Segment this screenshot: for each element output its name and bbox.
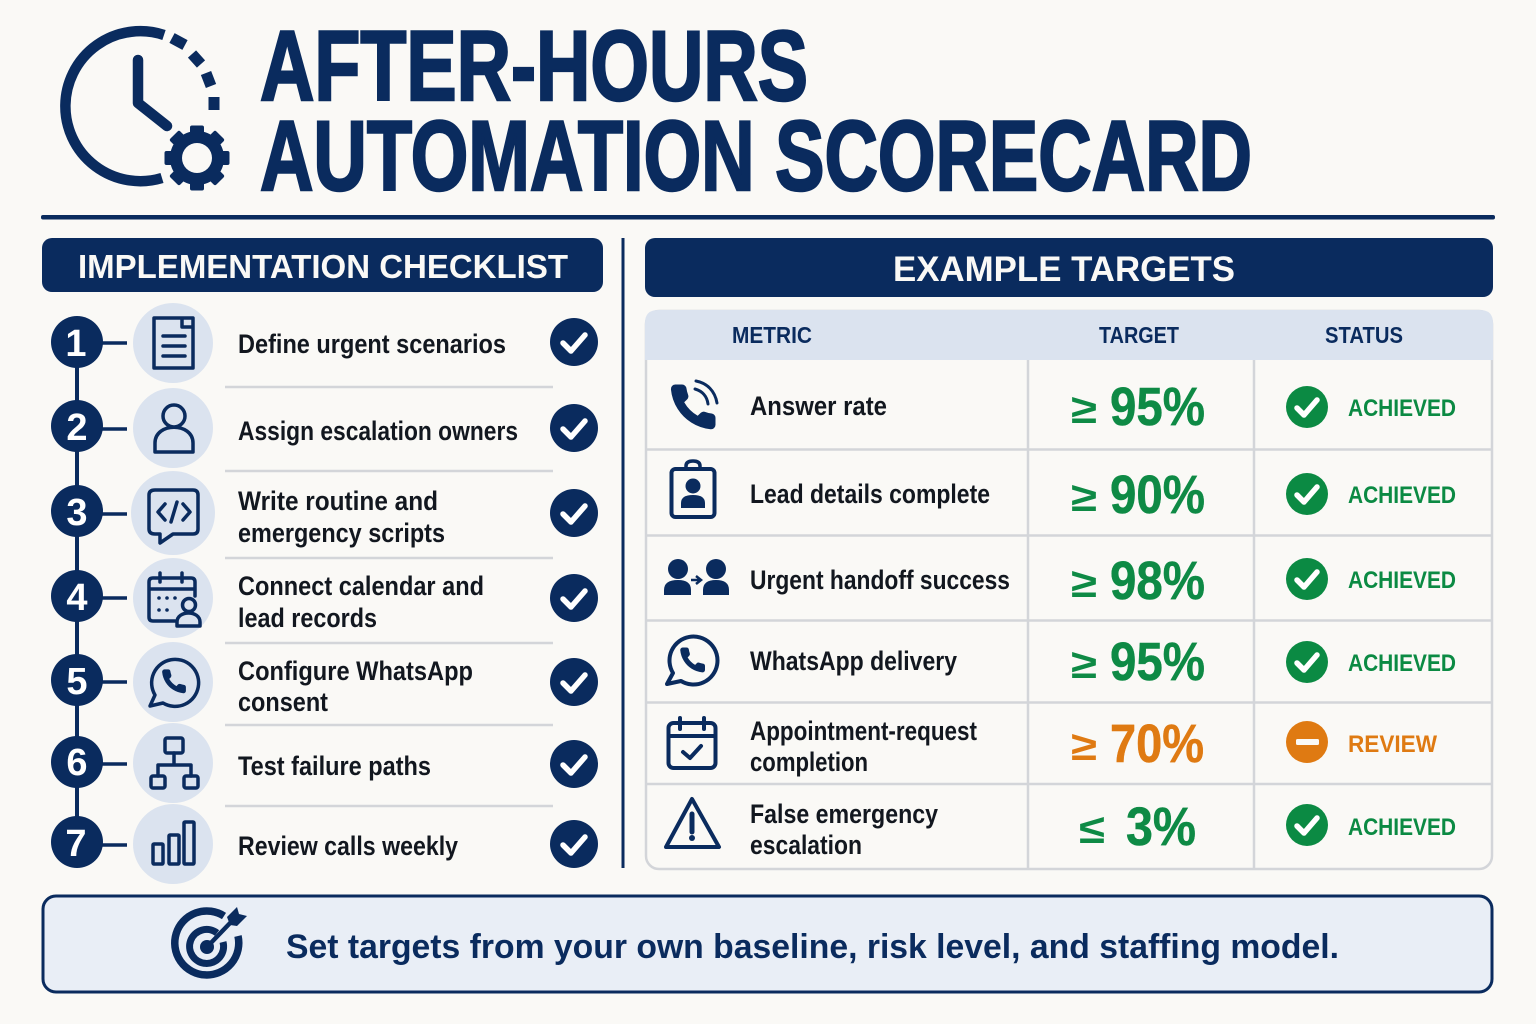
- step 5: 5: [66, 661, 88, 703]
- row: false emergency escalation: ACHIEVED: [1348, 814, 1456, 841]
- icon: warning triangle: [666, 799, 719, 847]
- table header: STATUS: [1325, 322, 1403, 348]
- row: whatsapp delivery: ≥: [1071, 641, 1097, 687]
- row: urgent handoff success: Urgent handoff success: [750, 565, 1010, 595]
- icon: whatsapp: [667, 637, 717, 685]
- row: urgent handoff success: ACHIEVED: [1348, 567, 1456, 594]
- icon: target with arrow: [175, 907, 247, 975]
- icon: calendar check: [668, 718, 716, 768]
- icon: id badge: [672, 461, 714, 517]
- row: whatsapp delivery: WhatsApp delivery: [750, 646, 957, 676]
- step 5: Configure WhatsApp: [238, 656, 473, 686]
- step 7: Review calls weekly: [238, 831, 458, 861]
- step 4: 4: [66, 577, 88, 619]
- step 6: [51, 723, 598, 803]
- step 4: Connect calendar and: [238, 571, 484, 601]
- row: appointment-request completion: Appointment-request: [750, 716, 977, 746]
- row: lead details complete: ACHIEVED: [1348, 482, 1456, 509]
- row: false emergency escalation: False emergency: [750, 799, 938, 829]
- table header: METRIC: [732, 322, 812, 348]
- step 5: consent: [238, 687, 328, 717]
- callout: set targets: Set targets from your own baseline, risk level, and staffing model.: [286, 928, 1339, 966]
- step 3: emergency scripts: [238, 518, 445, 548]
- heading: implementation checklist: IMPLEMENTATION CHECKLIST: [78, 248, 568, 285]
- icon: clock with gear: [65, 31, 229, 190]
- title: [260, 10, 1252, 211]
- row: answer rate: [671, 377, 1456, 437]
- row: lead details complete: ≥: [1071, 474, 1097, 520]
- table header: [645, 310, 1493, 360]
- step 3: [51, 471, 598, 555]
- row: false emergency escalation: ≤: [1079, 806, 1105, 852]
- step 2: [51, 388, 598, 468]
- row: answer rate: ACHIEVED: [1348, 395, 1456, 422]
- table header: TARGET: [1099, 322, 1179, 348]
- step 2: Assign escalation owners: [238, 416, 518, 446]
- callout: set targets: [43, 896, 1492, 992]
- row: whatsapp delivery: [667, 632, 1456, 692]
- step 3: Write routine and: [238, 486, 438, 516]
- row: answer rate: ≥: [1071, 386, 1097, 432]
- step 7: 7: [65, 823, 87, 865]
- icon: phone: [671, 381, 717, 429]
- step 6: Test failure paths: [238, 751, 431, 781]
- row: answer rate: Answer rate: [750, 391, 887, 421]
- heading: implementation checklist: [42, 238, 603, 292]
- row: urgent handoff success: ≥: [1071, 560, 1097, 606]
- icon: handoff people: [664, 559, 729, 595]
- row: appointment-request completion: completion: [750, 747, 868, 777]
- row: whatsapp delivery: ACHIEVED: [1348, 650, 1456, 677]
- row: whatsapp delivery: 95%: [1110, 632, 1205, 692]
- row: urgent handoff success: [664, 551, 1456, 611]
- row: lead details complete: Lead details complete: [750, 479, 990, 509]
- row: appointment-request completion: [668, 714, 1437, 777]
- row: false emergency escalation: [666, 797, 1456, 860]
- row: appointment-request completion: REVIEW: [1348, 731, 1437, 758]
- step 1: 1: [65, 323, 87, 365]
- heading: example targets: EXAMPLE TARGETS: [893, 250, 1235, 289]
- step 7: [51, 804, 598, 884]
- panel: example targets table: [645, 310, 1493, 869]
- title: AFTER-HOURS: [260, 10, 808, 121]
- row: false emergency escalation: escalation: [750, 830, 862, 860]
- row: urgent handoff success: 98%: [1110, 551, 1205, 611]
- row: appointment-request completion: 70%: [1110, 714, 1204, 774]
- step 1: [51, 303, 598, 383]
- step 4: [51, 558, 598, 638]
- row: false emergency escalation: 3%: [1126, 797, 1196, 857]
- row: answer rate: 95%: [1110, 377, 1205, 437]
- step 1: Define urgent scenarios: [238, 329, 506, 359]
- heading: example targets: [645, 238, 1493, 297]
- row: lead details complete: 90%: [1110, 465, 1205, 525]
- row: appointment-request completion: ≥: [1071, 723, 1097, 769]
- step 4: lead records: [238, 603, 377, 633]
- step 3: 3: [66, 492, 88, 534]
- step 6: 6: [66, 742, 88, 784]
- row: lead details complete: [672, 461, 1456, 525]
- step 5: [51, 642, 598, 722]
- panel: implementation checklist: [42, 238, 603, 884]
- step 2: 2: [66, 407, 88, 449]
